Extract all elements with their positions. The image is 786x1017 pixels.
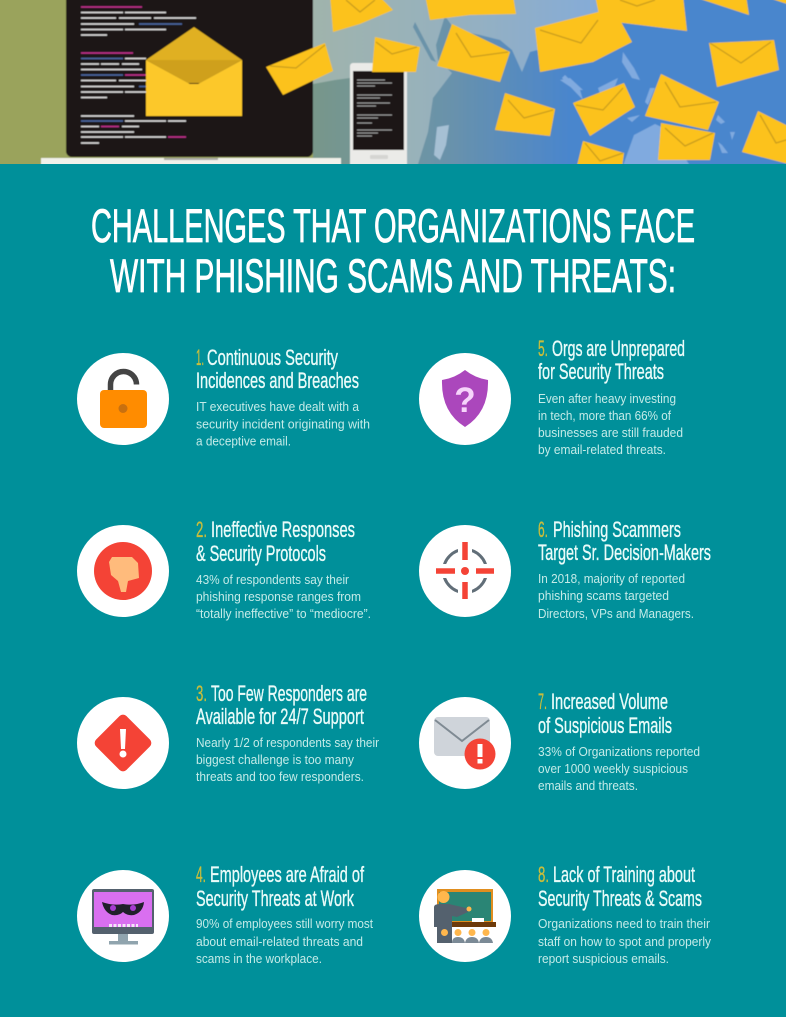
text: item 7: emails and threats. [538,779,638,793]
text: item 2: phishing response ranges from [196,590,361,604]
panel: item 5 [419,336,685,457]
text: item 8: 8. [538,862,549,887]
text: item 5 [538,336,685,457]
text: item 1: Continuous Security [207,345,338,370]
text: item 3: Nearly 1/2 of respondents say their [196,736,379,750]
panel: item 8 [419,862,712,966]
text: item 7: of Suspicious Emails [538,713,672,738]
text: item 8: Lack of Training about [553,862,695,887]
text: item 2: 2. [196,517,207,542]
icon: warning diamond [77,697,169,789]
text: item 8 [538,862,712,966]
text: item 1: Incidences and Breaches [196,368,359,393]
panel: item 7 [419,689,700,793]
text: item 7: 33% of Organizations reported [538,745,700,759]
panel: item 4 [77,862,373,966]
panel: item 1 [77,345,370,448]
text: item 8: Security Threats & Scams [538,886,702,911]
text: item 2: 43% of respondents say their [196,573,349,587]
icon: crosshair target [419,525,511,617]
text: item 5: Orgs are Unprepared [552,336,685,361]
text: item 3: 3. [196,681,207,706]
text: item 6: Phishing Scammers [553,517,681,542]
text: item 3: Available for 24/7 Support [196,704,364,729]
world map [313,0,786,174]
panel: item 6 [419,517,711,621]
text: item 1: security incident originating with [196,418,370,432]
flying envelopes [266,0,786,174]
panel: item 2 [77,517,371,621]
code lines on laptop screen [81,7,196,143]
text: item 2: Ineffective Responses [211,517,355,542]
text: item 2: “totally ineffective” to “mediocre”. [196,607,371,621]
text: item 6: In 2018, majority of reported [538,572,685,586]
text: item 4 [196,862,373,966]
text: item 7: 7. [538,689,547,714]
text: item 4: Security Threats at Work [196,886,355,911]
text: item 5: for Security Threats [538,359,664,384]
text: item 7: over 1000 weekly suspicious [538,762,688,776]
title [91,199,695,302]
text: item 2 [196,517,371,621]
text: item 8: Organizations need to train their [538,917,710,931]
icon: hacker on monitor [77,870,169,962]
text: item 7: Increased Volume [551,689,668,714]
text: item 1 [196,345,370,448]
text: item 3: threats and too few responders. [196,770,364,784]
text: item 3: biggest challenge is too many [196,753,355,767]
icon: trainer at chalkboard [419,870,511,962]
hero illustration: laptop, phone and flying emails [0,0,786,174]
text: item 6: phishing scams targeted [538,589,669,603]
panel: item 3 [77,681,379,789]
text: item 6 [538,517,711,621]
text: item 6: Directors, VPs and Managers. [538,607,694,621]
text: item 3 [196,681,379,784]
icon: envelope with alert [419,697,511,789]
laptop [41,0,341,174]
text: item 5: businesses are still frauded [538,426,683,440]
text: item 4: about email-related threats and [196,935,363,949]
open envelope [146,27,242,116]
icon: thumbs down [77,525,169,617]
text: item 4: 4. [196,862,206,887]
text: item 4: scams in the workplace. [196,952,322,966]
text: item 5: Even after heavy investing [538,392,676,406]
text: item 6: 6. [538,517,548,542]
icon: shield with question mark: ? [454,381,476,420]
text: item 4: Employees are Afraid of [210,862,365,887]
text: item 5: by email-related threats. [538,443,666,457]
text: item 4: 90% of employees still worry most [196,917,373,931]
text: item 5: in tech, more than 66% of [538,409,671,423]
text: item 7 [538,689,700,793]
text: item 2: & Security Protocols [196,541,326,566]
text: item 1: IT executives have dealt with a [196,400,359,414]
text: item 1: a deceptive email. [196,434,291,448]
text: item 3: Too Few Responders are [211,681,367,706]
text: item 5: 5. [538,336,548,361]
icon: shield with question mark [419,353,511,445]
text: item 1: 1. [196,345,204,370]
text: item 8: report suspicious emails. [538,952,669,966]
smartphone [350,63,407,174]
icon: open padlock [77,353,169,445]
text: item 8: staff on how to spot and properly [538,935,712,949]
